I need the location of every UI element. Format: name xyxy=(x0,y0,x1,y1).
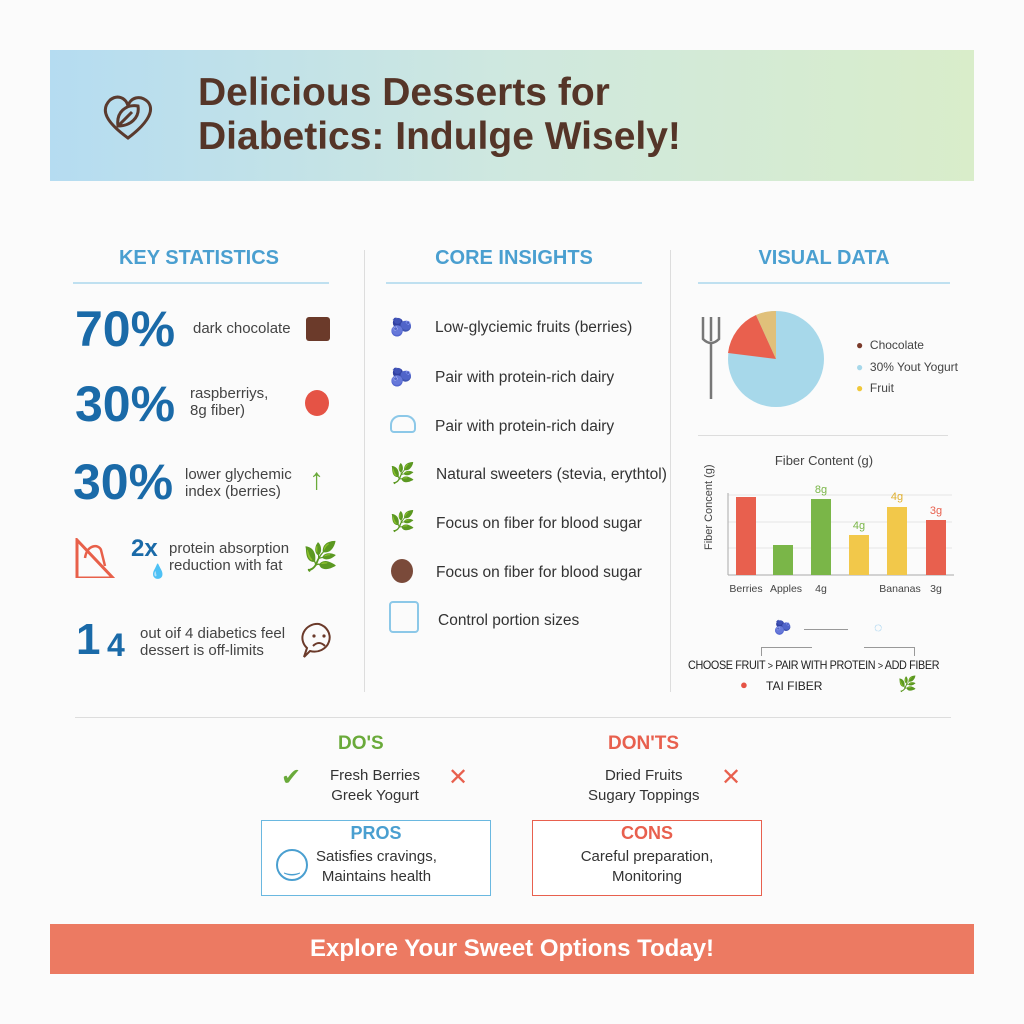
flow diagram xyxy=(688,619,939,693)
list: Control portion sizes xyxy=(438,612,579,629)
stat 70%: dark chocolate xyxy=(193,320,291,337)
icon: heart leaf xyxy=(104,96,152,140)
bar chart: 4g xyxy=(815,583,827,595)
cons box xyxy=(532,820,762,896)
stat 2x: reduction with fat xyxy=(169,557,282,574)
list: Focus on fiber for blood sugar xyxy=(436,515,642,532)
footer banner xyxy=(50,924,974,974)
bar chart: 3g xyxy=(930,583,942,595)
don'ts: Sugary Toppings xyxy=(588,787,699,804)
stat 70%: 70% xyxy=(75,301,175,357)
list: Pair with protein-rich dairy xyxy=(435,369,614,386)
list: 🫐 xyxy=(390,317,412,337)
list: Focus on fiber for blood sugar xyxy=(436,564,642,581)
stat 30% raspberries: 8g fiber) xyxy=(190,402,245,419)
header banner xyxy=(50,50,974,181)
stat 1 in 4: out oif 4 diabetics feel xyxy=(140,625,285,642)
title: Diabetics: Indulge Wisely! xyxy=(198,115,681,158)
don'ts: ✕ xyxy=(721,764,741,791)
flow diagram: ◌ xyxy=(874,619,882,635)
cons box: Careful preparation, xyxy=(581,848,713,865)
panel: key statistics xyxy=(73,247,338,664)
list: 🌿 xyxy=(390,463,415,485)
stat 1 in 4: 4 xyxy=(107,627,125,663)
stat 2x: 2x xyxy=(131,535,158,562)
cons box: Monitoring xyxy=(612,868,682,885)
do's: ✔ xyxy=(281,764,301,791)
stat 1 in 4: dessert is off-limits xyxy=(140,642,264,659)
bar chart: Fiber Content (g) xyxy=(775,453,873,468)
flow diagram: ● xyxy=(740,677,748,692)
bar chart: Bananas xyxy=(879,583,921,595)
stat 30% glycemic: 30% xyxy=(73,454,173,510)
stat 30% raspberries: raspberriys, xyxy=(190,385,268,402)
pros box: PROS xyxy=(350,823,402,843)
heading: VISUAL DATA xyxy=(758,247,890,269)
pros box: Maintains health xyxy=(322,868,431,885)
column dividers xyxy=(364,250,365,692)
flow diagram: 🫐 xyxy=(774,619,791,635)
list xyxy=(389,317,667,633)
do's: ✕ xyxy=(448,764,468,791)
flow diagram: 🌿 xyxy=(898,676,917,693)
list: 🌿 xyxy=(390,511,415,533)
do's: DO'S xyxy=(338,733,384,754)
bar chart: Fiber Concent (g) xyxy=(703,464,715,550)
stat 2x: 💧 xyxy=(149,563,166,579)
icon: fork xyxy=(702,317,720,399)
don'ts: Dried Fruits xyxy=(605,767,682,784)
cons box: CONS xyxy=(621,823,673,843)
pie chart xyxy=(728,311,824,407)
list: Pair with protein-rich dairy xyxy=(435,418,614,435)
panel: core insights xyxy=(386,247,667,633)
bar chart: 4g xyxy=(891,491,903,503)
bar chart: Apples xyxy=(770,583,802,595)
stat 2x: 🌿 xyxy=(303,541,338,572)
pie legend: ● Fruit xyxy=(856,381,894,395)
bar chart xyxy=(703,453,954,595)
flow diagram: TAI FIBER xyxy=(766,679,822,693)
stat 30% raspberries: 30% xyxy=(75,376,175,432)
pie legend xyxy=(856,338,958,395)
title: Delicious Desserts for xyxy=(198,71,610,114)
bar chart: Berries xyxy=(729,583,763,595)
pros box xyxy=(261,820,491,896)
do's xyxy=(281,733,468,804)
stat 30% glycemic: index (berries) xyxy=(185,483,281,500)
panel: visual data xyxy=(688,247,958,693)
list: 🫐 xyxy=(390,367,412,387)
do's: Greek Yogurt xyxy=(331,787,419,804)
stat 2x xyxy=(76,535,338,579)
pie legend: ● 30% Yout Yogurt xyxy=(856,360,958,374)
stat 30% glycemic: lower glychemic xyxy=(185,466,292,483)
don'ts xyxy=(588,733,741,804)
list: Low-glyciemic fruits (berries) xyxy=(435,319,632,336)
stat 30% glycemic: ↑ xyxy=(309,463,324,496)
stat 70% xyxy=(75,301,330,357)
flow diagram: CHOOSE FRUIT > PAIR WITH PROTEIN > ADD FIBER xyxy=(688,658,939,672)
pie legend: ● Chocolate xyxy=(856,338,924,352)
pros box: ‿ xyxy=(285,855,299,875)
stat 1 in 4: 1 xyxy=(76,615,100,664)
footer banner: Explore Your Sweet Options Today! xyxy=(310,935,714,962)
heading: CORE INSIGHTS xyxy=(435,247,593,269)
stat 30% glycemic xyxy=(73,454,324,510)
list: Natural sweeters (stevia, erythtol) xyxy=(436,466,667,483)
stat 30% raspberries xyxy=(75,376,329,432)
bar chart: 4g xyxy=(853,520,865,532)
pros box: Satisfies cravings, xyxy=(316,848,437,865)
title xyxy=(198,71,681,158)
bar chart: 3g xyxy=(930,505,942,517)
stat 1 in 4 xyxy=(76,615,331,664)
heading: KEY STATISTICS xyxy=(119,247,279,269)
don'ts: DON'TS xyxy=(608,733,679,754)
bar chart: 8g xyxy=(815,484,827,496)
stat 2x: protein absorption xyxy=(169,540,289,557)
do's: Fresh Berries xyxy=(330,767,420,784)
